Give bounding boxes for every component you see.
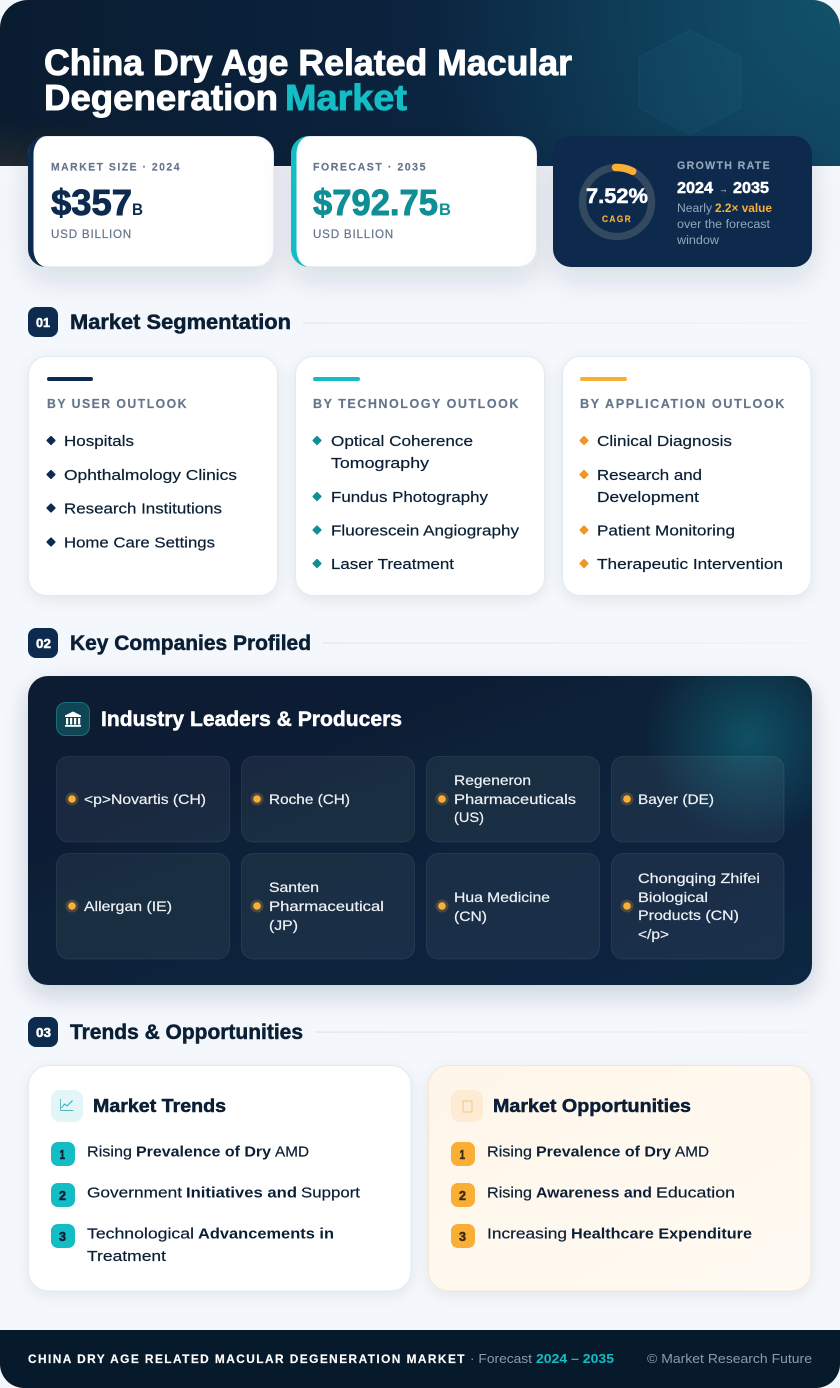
footer xyxy=(0,1330,840,1388)
section heading 02: Key Companies Profiled xyxy=(70,632,311,655)
panel: market trends xyxy=(28,1066,411,1291)
trend 1 xyxy=(51,1142,309,1166)
stat card: market size 2024: B xyxy=(132,200,143,219)
section heading 03 xyxy=(28,1017,812,1047)
stat card: forecast 2035: $792.75 xyxy=(313,182,438,223)
stat card: growth rate: Nearly xyxy=(677,203,712,215)
opportunity 3: Increasing xyxy=(487,1226,567,1242)
stat card: growth rate: → xyxy=(719,181,728,196)
section heading 01: Market Segmentation xyxy=(70,311,291,334)
list: application outlook items: Therapeutic Intervention xyxy=(597,556,783,573)
list: application outlook items: Patient Monitoring xyxy=(597,522,735,540)
stat card: forecast 2035 xyxy=(291,136,536,267)
trend 2 xyxy=(51,1183,361,1207)
panel: market opportunities: Market Opportunities xyxy=(493,1095,691,1116)
list: user outlook items: Research Institutions xyxy=(64,500,222,518)
list: user outlook items: Home Care Settings xyxy=(64,534,215,552)
trend 3: 3 xyxy=(59,1229,66,1244)
company: Regeneron: Regeneron xyxy=(454,772,531,788)
footer: 2024 – 2035 xyxy=(536,1352,614,1366)
footer: CHINA DRY AGE RELATED MACULAR DEGENERATION MARKET xyxy=(28,1354,466,1366)
company: Hua Medicine: (CN) xyxy=(454,908,487,924)
list: technology outlook items: Laser Treatment xyxy=(331,556,455,573)
opportunity 1: AMD xyxy=(675,1144,709,1160)
opportunity 1 xyxy=(451,1142,709,1166)
trend 3: Advancements in xyxy=(198,1226,334,1242)
opportunity 2: Education xyxy=(656,1184,735,1202)
company: Santen: Pharmaceutical xyxy=(269,898,384,914)
trend 3: Technological xyxy=(87,1226,194,1242)
company: Bayer xyxy=(612,756,784,842)
company: Chongqing Zhifei: Products (CN) xyxy=(638,907,739,923)
list: application outlook items: Clinical Diagnosis xyxy=(597,433,732,450)
CAGR donut xyxy=(582,167,652,236)
icon: classical building xyxy=(56,702,90,736)
company: Santen: (JP) xyxy=(269,917,298,933)
panel: industry leaders xyxy=(28,676,812,985)
company: Bayer: Bayer (DE) xyxy=(638,791,714,807)
opportunity 1: 1 xyxy=(460,1147,465,1162)
company: Allergan: Allergan (IE) xyxy=(84,898,172,914)
stat card: growth rate: 2035 xyxy=(733,180,769,197)
stat card: growth rate: GROWTH RATE xyxy=(677,160,771,172)
list: user outlook items: Hospitals xyxy=(64,433,134,450)
stat card: growth rate: window xyxy=(676,235,720,247)
opportunity 2 xyxy=(451,1183,735,1207)
list: technology outlook items: Optical Coherence xyxy=(331,433,473,450)
company: Chongqing Zhifei xyxy=(612,854,784,959)
stat card: market size 2024 xyxy=(28,136,274,267)
section heading 03: 03 xyxy=(36,1025,51,1040)
list: technology outlook items: Tomography xyxy=(331,455,430,472)
stat card: growth rate xyxy=(553,136,812,267)
icon: chart xyxy=(51,1090,83,1122)
trend 1: Rising xyxy=(87,1144,132,1160)
opportunity 2: 2 xyxy=(459,1188,466,1203)
section heading 01 xyxy=(28,307,812,337)
company: Regeneron: Pharmaceuticals xyxy=(454,791,576,807)
opportunity 2: Awareness and xyxy=(536,1184,652,1202)
list: user outlook items: Ophthalmology Clinics xyxy=(64,467,237,484)
panel: by user outlook xyxy=(28,356,278,596)
company: Hua Medicine: Hua Medicine xyxy=(454,889,550,905)
icon: missing glyph box xyxy=(451,1090,483,1122)
stat card: market size 2024: USD BILLION xyxy=(51,227,132,241)
panel: by technology outlook: BY TECHNOLOGY OUTLOOK xyxy=(313,397,520,411)
trend 1: 1 xyxy=(60,1147,65,1162)
company: Santen: Santen xyxy=(269,879,319,895)
panel: industry leaders: Industry Leaders & Producers xyxy=(101,708,402,731)
trend 1: AMD xyxy=(275,1144,309,1160)
company: Chongqing Zhifei: Biological xyxy=(638,889,708,905)
CAGR donut: 7.52% xyxy=(586,185,648,208)
section heading 01: 01 xyxy=(36,315,50,330)
list: technology outlook items xyxy=(312,433,520,573)
section heading 02 xyxy=(28,628,812,658)
stat card: forecast 2035: USD BILLION xyxy=(313,227,394,241)
trend 3: Treatment xyxy=(87,1248,167,1265)
company: Chongqing Zhifei: Chongqing Zhifei xyxy=(638,870,760,886)
stat card: forecast 2035: FORECAST · 2035 xyxy=(313,162,427,174)
company: Santen xyxy=(242,854,414,959)
company: Novartis xyxy=(56,756,230,842)
opportunity 1: Rising xyxy=(487,1144,532,1160)
opportunity 2: Rising xyxy=(487,1184,532,1202)
company: Novartis: <p>Novartis (CH) xyxy=(84,791,206,807)
CAGR donut: CAGR xyxy=(602,214,632,224)
company: Regeneron xyxy=(426,756,600,842)
trend 2: Initiatives and xyxy=(186,1184,297,1202)
trend 2: 2 xyxy=(59,1188,66,1203)
opportunity 3 xyxy=(451,1224,752,1248)
trend 3 xyxy=(51,1224,334,1265)
list: technology outlook items: Fluorescein Angiography xyxy=(331,522,520,540)
stat card: forecast 2035: B xyxy=(439,200,451,219)
list: application outlook items xyxy=(579,433,783,573)
trend 2: Government xyxy=(87,1184,183,1202)
title xyxy=(44,42,572,118)
section heading 03: Trends & Opportunities xyxy=(70,1021,303,1044)
stat card: market size 2024: $357 xyxy=(51,182,132,223)
panel: by application outlook: BY APPLICATION OUTLOOK xyxy=(580,397,786,411)
opportunity 3: Healthcare Expenditure xyxy=(571,1226,752,1242)
panel: market trends: Market Trends xyxy=(93,1095,226,1116)
list: application outlook items: Development xyxy=(597,489,700,506)
opportunity 1: Prevalence of Dry xyxy=(536,1144,672,1160)
trend 1: Prevalence of Dry xyxy=(136,1144,272,1160)
stat card: growth rate: 2.2× value xyxy=(715,203,772,215)
company: Allergan xyxy=(56,854,230,959)
panel: by technology outlook xyxy=(296,356,544,596)
list: application outlook items: Research and xyxy=(597,467,702,484)
list: user outlook items xyxy=(46,433,237,552)
trend 2: Support xyxy=(301,1184,361,1202)
opportunity 3: 3 xyxy=(459,1229,466,1244)
company: Regeneron: (US) xyxy=(454,809,484,825)
stat card: market size 2024: MARKET SIZE · 2024 xyxy=(51,162,181,174)
title: Market xyxy=(285,77,407,118)
footer: · Forecast xyxy=(470,1352,533,1366)
stat card: growth rate: 2024 xyxy=(677,180,713,197)
list: technology outlook items: Fundus Photography xyxy=(331,489,489,506)
company: Chongqing Zhifei: </p> xyxy=(638,926,669,942)
stat card: growth rate: over the forecast xyxy=(677,219,771,231)
section heading 02: 02 xyxy=(36,636,51,651)
panel: market opportunities xyxy=(428,1066,811,1291)
title: Degeneration xyxy=(44,77,278,118)
title: China Dry Age Related Macular xyxy=(44,42,572,83)
panel: by user outlook: BY USER OUTLOOK xyxy=(47,397,188,411)
company: Hua Medicine xyxy=(426,854,600,959)
company: Roche: Roche (CH) xyxy=(269,791,350,807)
company: Roche xyxy=(242,756,414,842)
footer: © Market Research Future xyxy=(647,1352,812,1366)
header banner xyxy=(0,0,840,166)
panel: by application outlook xyxy=(562,356,811,596)
